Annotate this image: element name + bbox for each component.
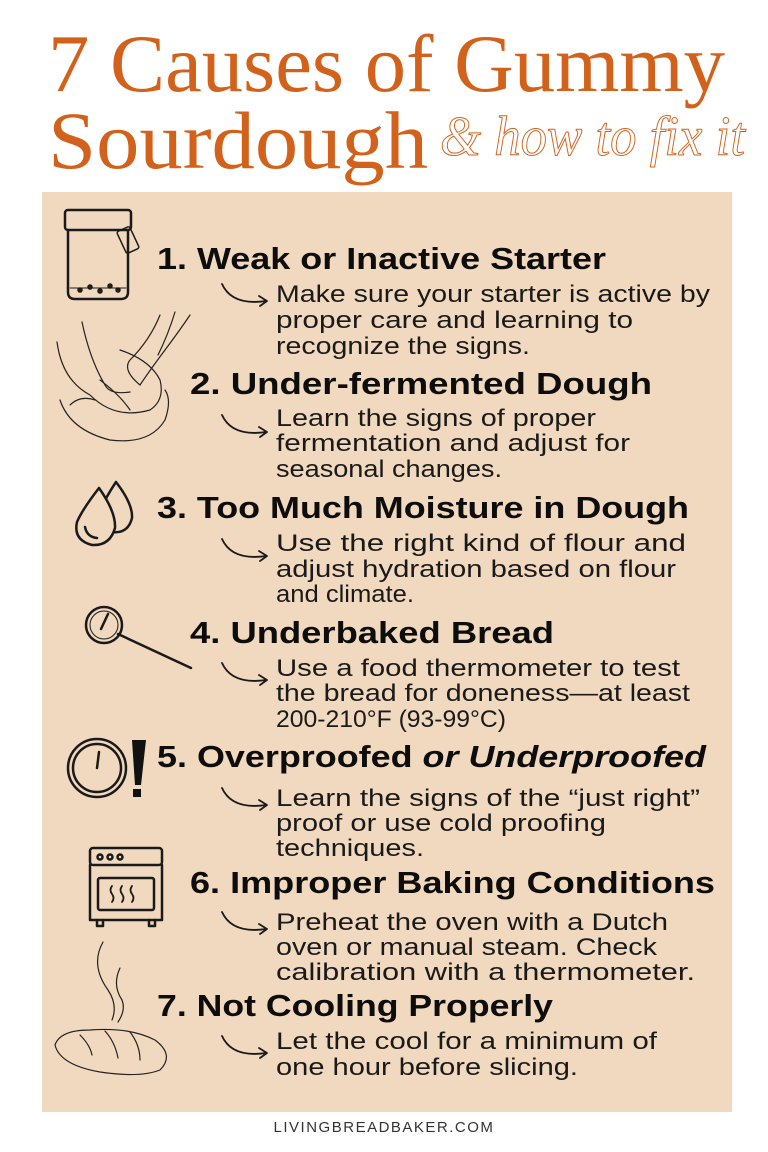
title: 7 Causes of Gummy bbox=[48, 18, 725, 109]
text 3: and climate. bbox=[276, 581, 414, 608]
text 2 bbox=[276, 405, 630, 483]
arrow 4 bbox=[222, 663, 267, 685]
text 5: techniques. bbox=[276, 835, 424, 862]
text 7 bbox=[276, 1028, 657, 1081]
icon: jar bbox=[65, 210, 139, 299]
title bbox=[48, 18, 725, 186]
text 6: oven or manual steam. Check bbox=[276, 934, 658, 961]
heading 6: 6. Improper Baking Conditions bbox=[190, 865, 715, 900]
text 7: one hour before slicing. bbox=[276, 1054, 578, 1081]
icon: thermometer bbox=[86, 607, 191, 668]
text 6: calibration with a thermometer. bbox=[276, 959, 695, 986]
footer: LIVINGBREADBAKER.COM bbox=[274, 1119, 494, 1136]
heading 3: 3. Too Much Moisture in Dough bbox=[157, 490, 689, 525]
icon: clock with exclamation bbox=[68, 739, 146, 797]
text 7: Let the cool for a minimum of bbox=[276, 1028, 657, 1055]
arrow 1 bbox=[222, 284, 267, 306]
arrow 2 bbox=[222, 415, 267, 437]
heading 5: 5. Overproofed or Underproofed bbox=[157, 739, 707, 774]
arrow 6 bbox=[222, 912, 267, 934]
text 1 bbox=[276, 281, 710, 360]
panel bbox=[42, 192, 732, 1112]
text 3 bbox=[276, 530, 686, 608]
heading 1: 1. Weak or Inactive Starter bbox=[157, 241, 606, 276]
text 2: seasonal changes. bbox=[276, 456, 502, 483]
text 1: proper care and learning to bbox=[276, 307, 633, 334]
text 5: proof or use cold proofing bbox=[276, 810, 606, 837]
icon: hands kneading dough bbox=[57, 312, 190, 441]
text 4: the bread for doneness—at least bbox=[276, 680, 690, 707]
text 5: Learn the signs of the “just right” bbox=[276, 785, 700, 812]
icon: oven bbox=[90, 848, 162, 926]
text 2: Learn the signs of proper bbox=[276, 405, 596, 432]
text 3: Use the right kind of flour and bbox=[276, 530, 686, 557]
text 4 bbox=[276, 655, 690, 733]
title: Sourdough bbox=[48, 95, 428, 186]
text 4: Use a food thermometer to test bbox=[276, 655, 680, 682]
text 2: fermentation and adjust for bbox=[276, 430, 630, 457]
text 1: Make sure your starter is active by bbox=[276, 281, 710, 308]
text 1: recognize the signs. bbox=[276, 333, 530, 360]
heading 4: 4. Underbaked Bread bbox=[190, 615, 554, 650]
heading 7: 7. Not Cooling Properly bbox=[157, 988, 554, 1023]
subtitle script: & how to fix it bbox=[440, 106, 746, 168]
arrow 5 bbox=[222, 788, 267, 810]
arrow 7 bbox=[222, 1036, 267, 1058]
icon: steaming bread bbox=[55, 942, 166, 1075]
text 6 bbox=[276, 909, 695, 986]
text 4: 200-210°F (93-99°C) bbox=[276, 706, 506, 733]
text 3: adjust hydration based on flour bbox=[276, 556, 676, 583]
text 6: Preheat the oven with a Dutch bbox=[276, 909, 668, 936]
icon: water drops bbox=[76, 482, 132, 545]
heading 2: 2. Under-fermented Dough bbox=[190, 366, 652, 401]
text 5 bbox=[276, 785, 700, 862]
arrow 3 bbox=[222, 539, 267, 561]
